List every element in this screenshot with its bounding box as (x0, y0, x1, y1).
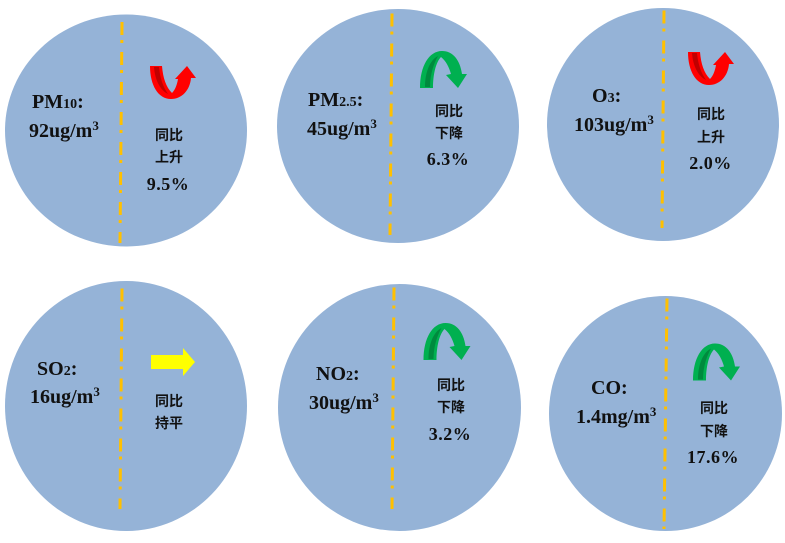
change: up 9.5% (147, 127, 189, 194)
label: PM10 value (29, 91, 99, 142)
label: PM10 value: PM10: (32, 91, 84, 113)
label: CO value: 3 (650, 404, 657, 419)
change: down 3.2%: 同比 (437, 377, 465, 393)
change: up 2.0%: 同比 (697, 106, 725, 122)
change: flat: 持平 (155, 415, 183, 431)
icon: red up arrow (150, 66, 196, 99)
change: down 6.3% (427, 103, 469, 169)
change: down 6.3%: 同比 (435, 103, 463, 119)
panel: SO2 (5, 281, 247, 531)
change: down 3.2%: 3.2% (429, 424, 471, 444)
panel: O3 (547, 8, 779, 241)
label: PM2.5 value: PM2.5: (308, 89, 363, 111)
change: up 9.5%: 上升 (155, 149, 183, 165)
change: down 3.2% (429, 377, 471, 444)
label: CO value: 1.4mg/m (576, 406, 650, 428)
change: up 2.0%: 2.0% (689, 153, 732, 173)
label: SO2 value (30, 358, 100, 408)
label: NO2 value: 3 (372, 390, 379, 405)
change: down 6.3%: 下降 (435, 125, 463, 141)
icon: green down arrow (693, 344, 740, 380)
label: CO value: CO: (591, 377, 628, 399)
label: PM2.5 value: 45ug/m (307, 118, 370, 140)
label: O3 value: 3 (647, 112, 654, 127)
label: NO2 value: NO2: (316, 363, 360, 385)
panel: NO2 (278, 284, 521, 531)
label: NO2 value: 30ug/m (309, 392, 372, 414)
change: up 2.0%: 上升 (697, 129, 725, 145)
label: SO2 value: SO2: (37, 358, 77, 380)
change: down 17.6%: 同比 (700, 400, 728, 416)
change: flat (155, 393, 183, 431)
icon: yellow flat arrow (151, 348, 195, 376)
label: PM10 value: 3 (92, 118, 99, 133)
icon: red up arrow (688, 52, 734, 85)
label: O3 value: O3: (592, 85, 621, 107)
change: down 6.3%: 6.3% (427, 149, 469, 169)
change: down 17.6% (687, 400, 739, 467)
change: up 9.5%: 9.5% (147, 174, 189, 194)
label: O3 value (574, 85, 654, 136)
change: down 17.6%: 17.6% (687, 447, 739, 467)
panel: PM2.5 (277, 9, 519, 243)
label: CO value (576, 377, 657, 428)
change: flat: 同比 (155, 393, 183, 409)
label: PM2.5 value (307, 89, 377, 140)
label: O3 value: 103ug/m (574, 114, 647, 136)
label: SO2 value: 3 (93, 384, 100, 399)
change: up 9.5%: 同比 (155, 127, 183, 143)
label: PM2.5 value: 3 (370, 116, 377, 131)
change: down 3.2%: 下降 (437, 399, 465, 415)
change: down 17.6%: 下降 (700, 423, 728, 439)
label: PM10 value: 92ug/m (29, 120, 92, 142)
change: up 2.0% (689, 106, 732, 173)
icon: green down arrow (420, 51, 467, 88)
label: SO2 value: 16ug/m (30, 386, 93, 408)
icon: green down arrow (424, 323, 470, 360)
panel: CO (549, 296, 782, 531)
label: NO2 value (309, 363, 379, 414)
panel: PM10 (5, 14, 247, 246)
